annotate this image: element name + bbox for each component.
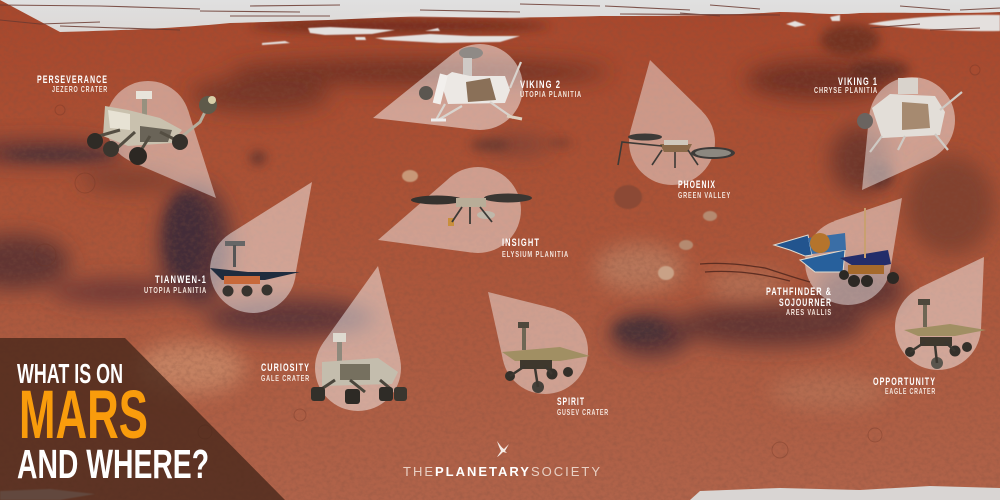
label: Pathfinder and Sojourner: PATHFINDER & [766, 286, 832, 298]
rover: Tianwen-1 (Zhurong) [210, 241, 300, 296]
rover: Perseverance [87, 91, 217, 165]
logo: The Planetary Society [403, 441, 600, 479]
pin: Tianwen-1 [144, 182, 312, 313]
icon: planetary society swoosh [497, 441, 509, 457]
north polar cap [0, 0, 1000, 45]
pin: InSight [378, 167, 569, 259]
label: Perseverance: JEZERO CRATER [52, 84, 108, 94]
pin: Phoenix [618, 60, 735, 200]
label: Curiosity: GALE CRATER [261, 373, 310, 383]
lander: Viking 2 [419, 47, 522, 120]
lander and rover: Pathfinder and Sojourner [774, 208, 899, 287]
pin: Viking 2 [373, 44, 582, 130]
label: Spirit: GUSEV CRATER [557, 407, 609, 417]
pin: Opportunity [873, 257, 986, 396]
label: Perseverance: PERSEVERANCE [37, 74, 108, 86]
label: Pathfinder and Sojourner: SOJOURNER [779, 297, 832, 309]
label: Curiosity: CURIOSITY [261, 362, 310, 374]
pin: Curiosity [261, 266, 407, 411]
lander: Viking 1 [857, 78, 962, 152]
pin: Viking 1 [814, 76, 962, 190]
label: Opportunity: OPPORTUNITY [873, 376, 936, 388]
label: Viking 2: VIKING 2 [520, 79, 561, 91]
pin: Spirit [488, 292, 609, 417]
label: Viking 1: VIKING 1 [838, 76, 878, 88]
pin: Perseverance [37, 74, 217, 198]
south polar cap [0, 486, 1000, 500]
label: Phoenix [678, 179, 731, 200]
label: Tianwen-1: TIANWEN-1 [155, 274, 207, 286]
label: Tianwen-1: UTOPIA PLANITIA [144, 285, 207, 295]
rover: Curiosity [311, 333, 407, 404]
label: Viking 2 [520, 79, 582, 99]
label: Phoenix: GREEN VALLEY [678, 190, 731, 200]
label: Viking 2: UTOPIA PLANITIA [520, 89, 582, 99]
label: Spirit [557, 396, 609, 417]
label: Curiosity [261, 362, 310, 383]
label: Phoenix: PHOENIX [678, 179, 716, 191]
lander: Phoenix [618, 134, 735, 168]
pin: Pathfinder and Sojourner [700, 198, 902, 317]
tracks: Ares Vallis [700, 263, 810, 282]
title text: MARS [19, 376, 148, 453]
label: Pathfinder and Sojourner: ARES VALLIS [786, 307, 832, 317]
label: Perseverance [37, 74, 108, 94]
lander: InSight [411, 194, 532, 226]
rover: Opportunity [904, 299, 986, 369]
label: InSight: ELYSIUM PLANITIA [502, 249, 569, 259]
title text: AND WHERE? [17, 441, 209, 487]
rover: Spirit [502, 322, 590, 393]
title text [17, 358, 209, 487]
label: Tianwen-1 [144, 274, 207, 295]
wordmark: THEPLANETARYSOCIETY [403, 464, 600, 479]
label: Pathfinder and Sojourner [766, 286, 832, 317]
label: Opportunity: EAGLE CRATER [885, 386, 936, 396]
label: InSight: INSIGHT [502, 237, 540, 249]
label: Viking 1 [814, 76, 878, 95]
title text: WHAT IS ON [17, 358, 123, 389]
label: Spirit: SPIRIT [557, 396, 585, 408]
label: InSight [502, 237, 569, 259]
label: Viking 1: CHRYSE PLANITIA [814, 85, 878, 95]
label: Opportunity [873, 376, 936, 396]
title panel [0, 338, 285, 500]
